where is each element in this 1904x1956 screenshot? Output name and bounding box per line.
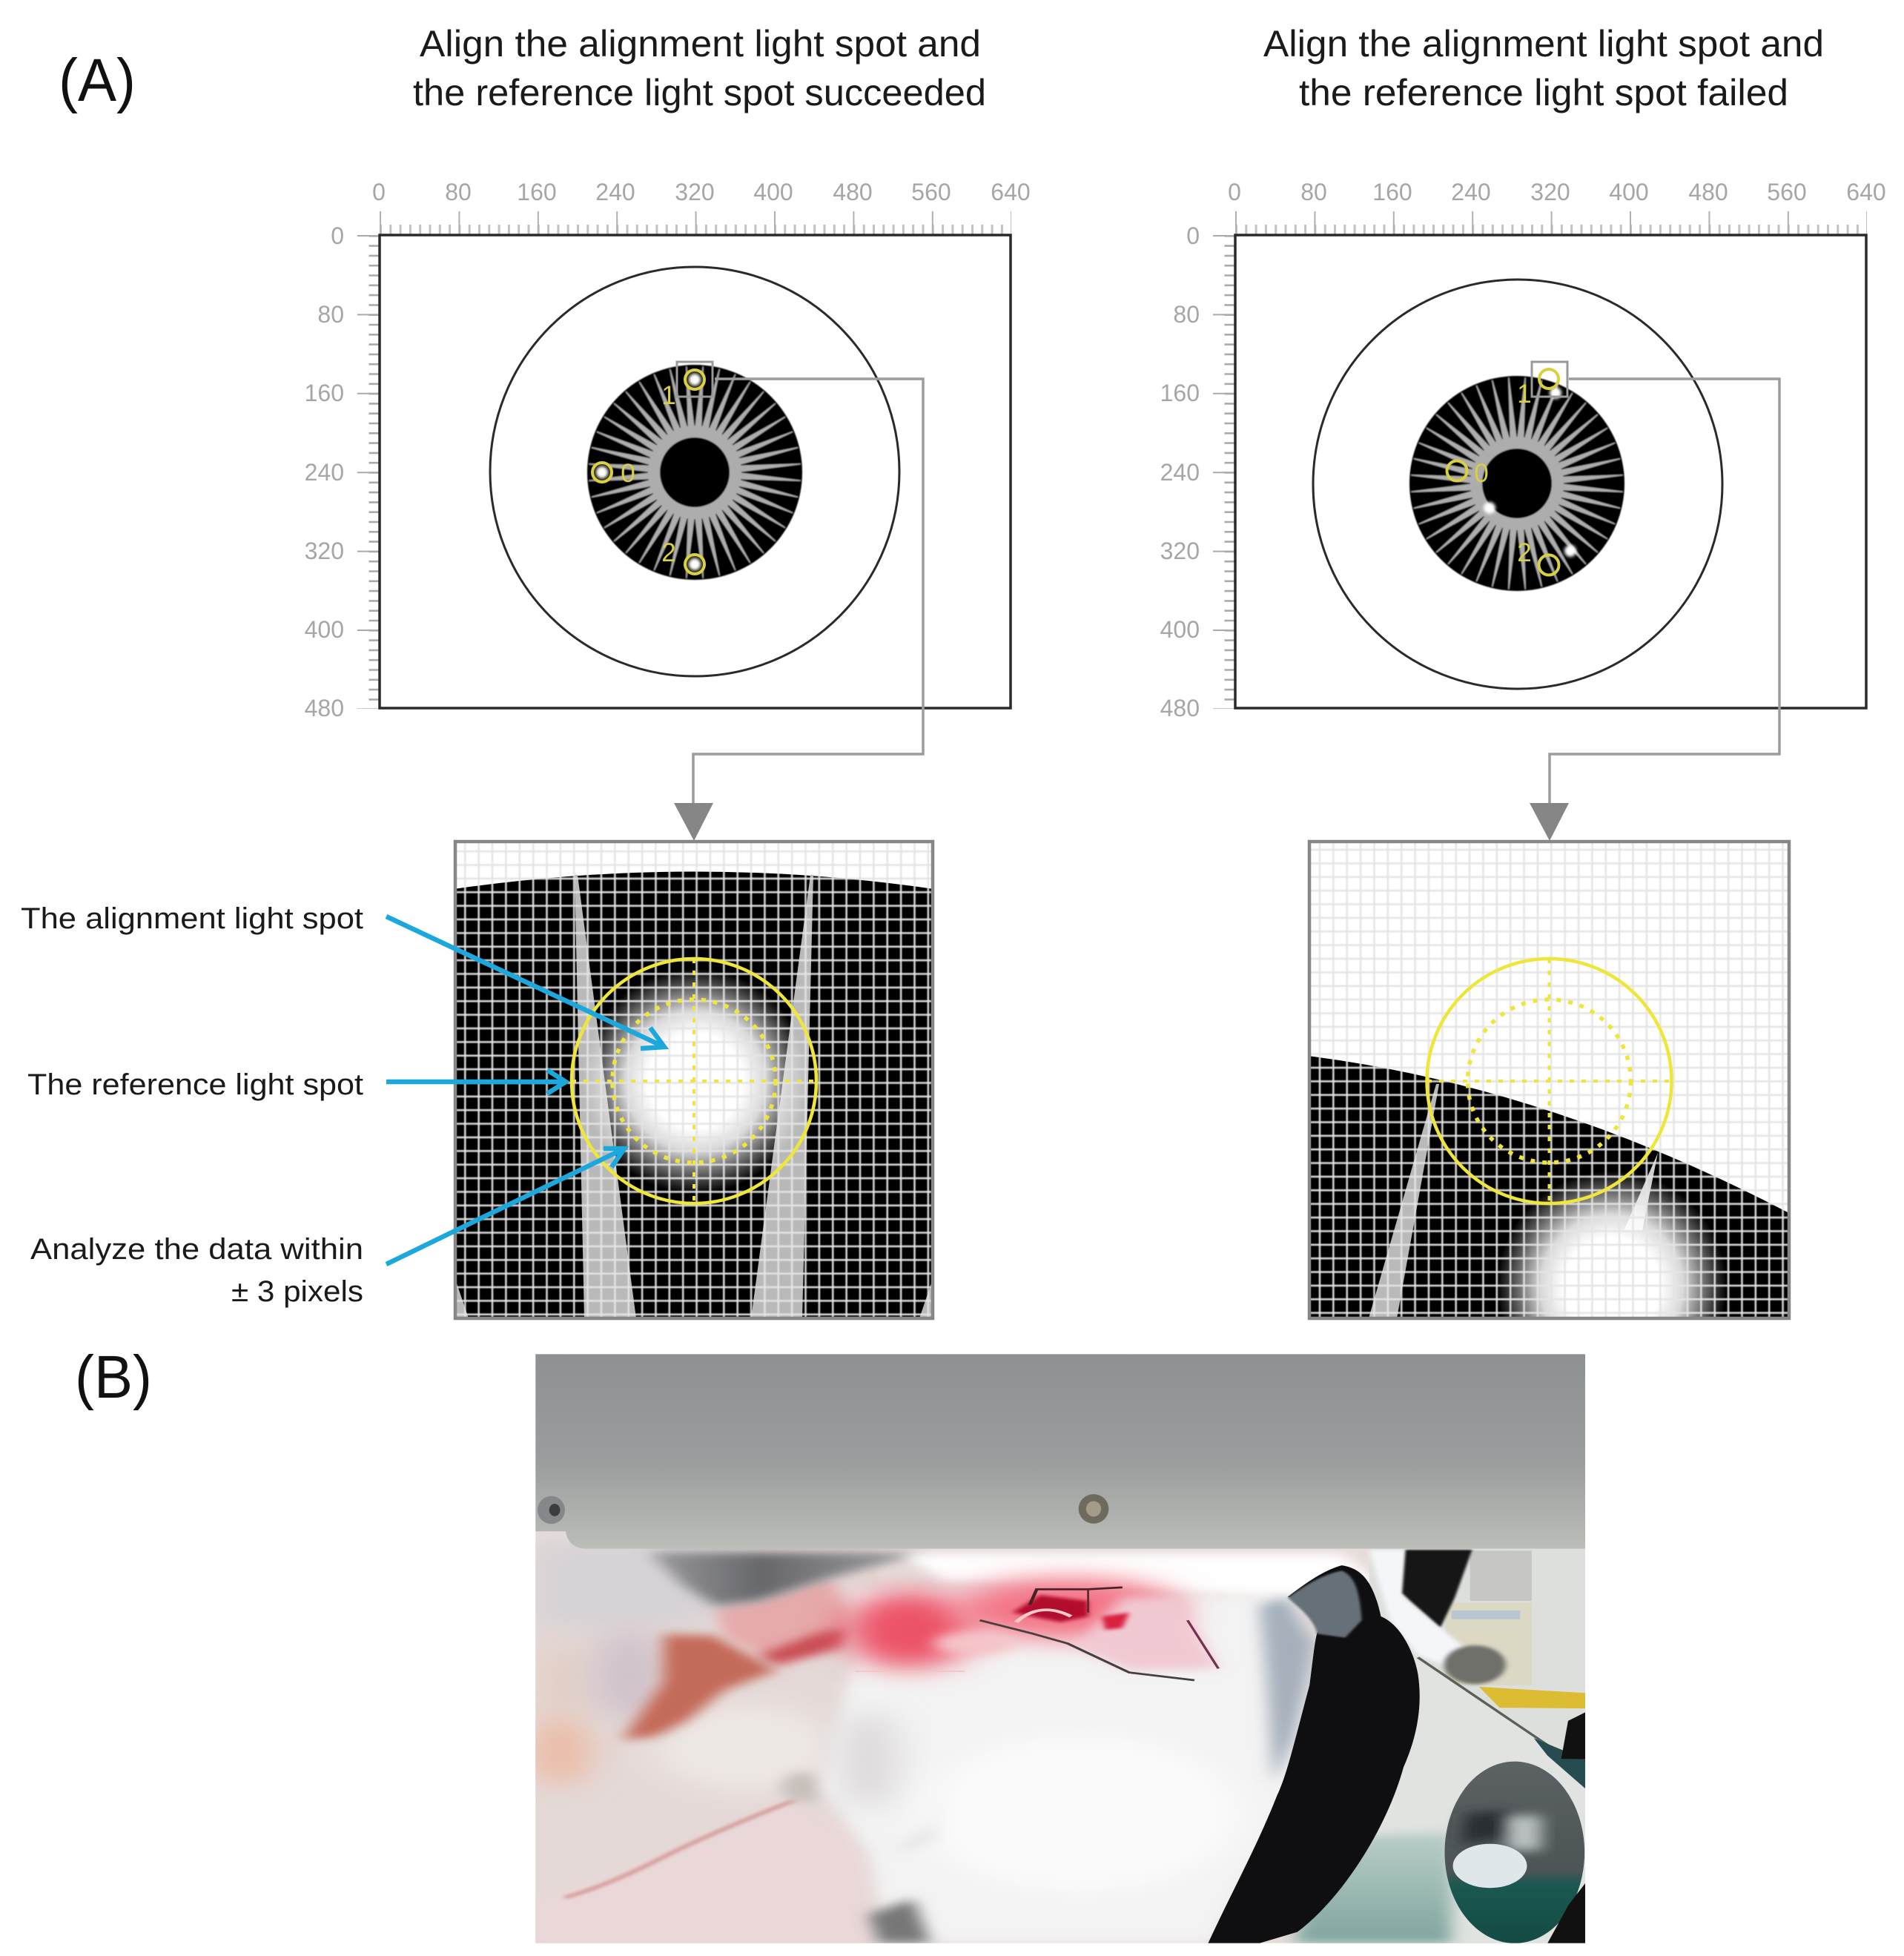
spot numbers: 1: [1517, 380, 1532, 409]
top axis labels: 0: [372, 179, 386, 205]
white fur body: [821, 1553, 1397, 1943]
arrow: alignment light spot: [386, 916, 664, 1048]
panel label A: (A): [59, 47, 136, 114]
left axis labels: [305, 222, 344, 721]
top axis labels: 160: [1372, 179, 1412, 205]
connector: failed zoom: [1530, 362, 1779, 841]
top axis labels: 560: [1767, 179, 1807, 205]
photo: rabbit under imaging device: [532, 1354, 1585, 1943]
heading: succeeded: the reference light spot succeeded: [413, 72, 986, 113]
ruler ticks: [368, 223, 1011, 709]
panel: succeeded camera view: [305, 179, 1031, 721]
connector: succeeded zoom: [674, 362, 923, 841]
anesthesia mask glass: [1294, 1655, 1585, 1943]
left axis labels: 480: [1160, 695, 1200, 721]
iris rays: [455, 875, 933, 1318]
black mask ring: [1208, 1565, 1420, 1943]
top axis labels: 640: [1846, 179, 1886, 205]
left axis labels: 0: [1186, 222, 1200, 249]
outer eye circle: [490, 267, 899, 676]
top axis labels: 560: [911, 179, 951, 205]
top axis labels: 640: [991, 179, 1031, 205]
imaging device housing: [535, 1354, 1585, 1549]
surroundings on right: [1369, 1548, 1585, 1750]
outer eye circle: [1313, 280, 1722, 689]
reference circle and analysis window: [1427, 959, 1671, 1203]
left axis labels: 320: [305, 538, 344, 564]
label: alignment light spot: The alignment light spot: [21, 902, 363, 935]
label: analyze data: ± 3 pixels: [231, 1275, 363, 1308]
spot numbers: [1474, 380, 1532, 567]
iris with rays: [569, 347, 820, 598]
iris rays: [1369, 1084, 1658, 1318]
top axis labels: 400: [753, 179, 793, 205]
left axis labels: 240: [1160, 459, 1200, 486]
heading: succeeded: [413, 23, 986, 113]
ruler ticks: [1224, 223, 1867, 709]
left axis labels: 320: [1160, 538, 1200, 564]
spot numbers: 0: [1474, 459, 1489, 488]
top axis labels: 80: [1300, 179, 1327, 205]
top axis labels: 480: [1688, 179, 1728, 205]
top axis labels: 240: [1451, 179, 1491, 205]
left axis labels: 240: [305, 459, 344, 486]
left axis labels: 80: [1173, 301, 1200, 328]
alignment light spot: [1499, 1173, 1725, 1317]
heading: failed: [1263, 23, 1824, 113]
top axis labels: 480: [833, 179, 873, 205]
top axis labels: 320: [1530, 179, 1570, 205]
heading: failed: the reference light spot failed: [1299, 72, 1788, 113]
heading: succeeded: Align the alignment light spot and: [420, 23, 981, 65]
shaved red skin: [844, 1578, 1218, 1680]
panel: failed camera view: [1160, 179, 1886, 721]
top axis labels: 160: [517, 179, 557, 205]
spot numbers: 0: [621, 459, 635, 488]
panel label B: (B): [75, 1344, 152, 1411]
zoom panel: succeeded: [454, 842, 934, 1320]
left axis labels: 400: [1160, 616, 1200, 643]
zoom panel: failed: [1308, 839, 1791, 1320]
top axis labels: [1228, 179, 1886, 205]
actual light spots: [1484, 387, 1576, 557]
screws: [1079, 1494, 1108, 1524]
left axis labels: [1160, 222, 1200, 721]
reference circle and analysis window: [572, 959, 816, 1203]
spot numbers: [621, 381, 676, 567]
top axis labels: 400: [1609, 179, 1649, 205]
image frame: [1235, 235, 1866, 708]
pixel grid: [1309, 842, 1789, 1318]
label: analyze data: Analyze the data within: [30, 1233, 363, 1266]
alignment light spot: [583, 968, 808, 1194]
reference circles: [1447, 369, 1558, 575]
reference circles with light spots: [592, 370, 704, 574]
arrow: reference light spot: [386, 1070, 566, 1094]
left axis labels: 400: [305, 616, 344, 643]
top axis labels: 80: [445, 179, 472, 205]
top axis labels: 0: [1228, 179, 1241, 205]
left axis labels: 80: [317, 301, 344, 328]
left axis labels: 160: [1160, 380, 1200, 406]
left axis labels: 160: [305, 380, 344, 406]
left axis labels: 480: [305, 695, 344, 721]
spot numbers: 2: [1517, 538, 1532, 567]
iris with rays: [1392, 358, 1642, 609]
arrow: analyze window: [386, 1149, 624, 1264]
spot numbers: 1: [661, 381, 676, 410]
top axis labels: 320: [675, 179, 715, 205]
label: reference light spot: The reference light spot: [27, 1068, 363, 1101]
label: analyze data: [30, 1233, 363, 1308]
pixel grid: [455, 842, 933, 1318]
image frame: [380, 235, 1011, 708]
top axis labels: 240: [595, 179, 635, 205]
top axis labels: [372, 179, 1031, 205]
heading: failed: Align the alignment light spot and: [1263, 23, 1824, 65]
left axis labels: 0: [331, 222, 344, 249]
left body: [532, 1543, 930, 1943]
spot numbers: 2: [661, 538, 676, 567]
